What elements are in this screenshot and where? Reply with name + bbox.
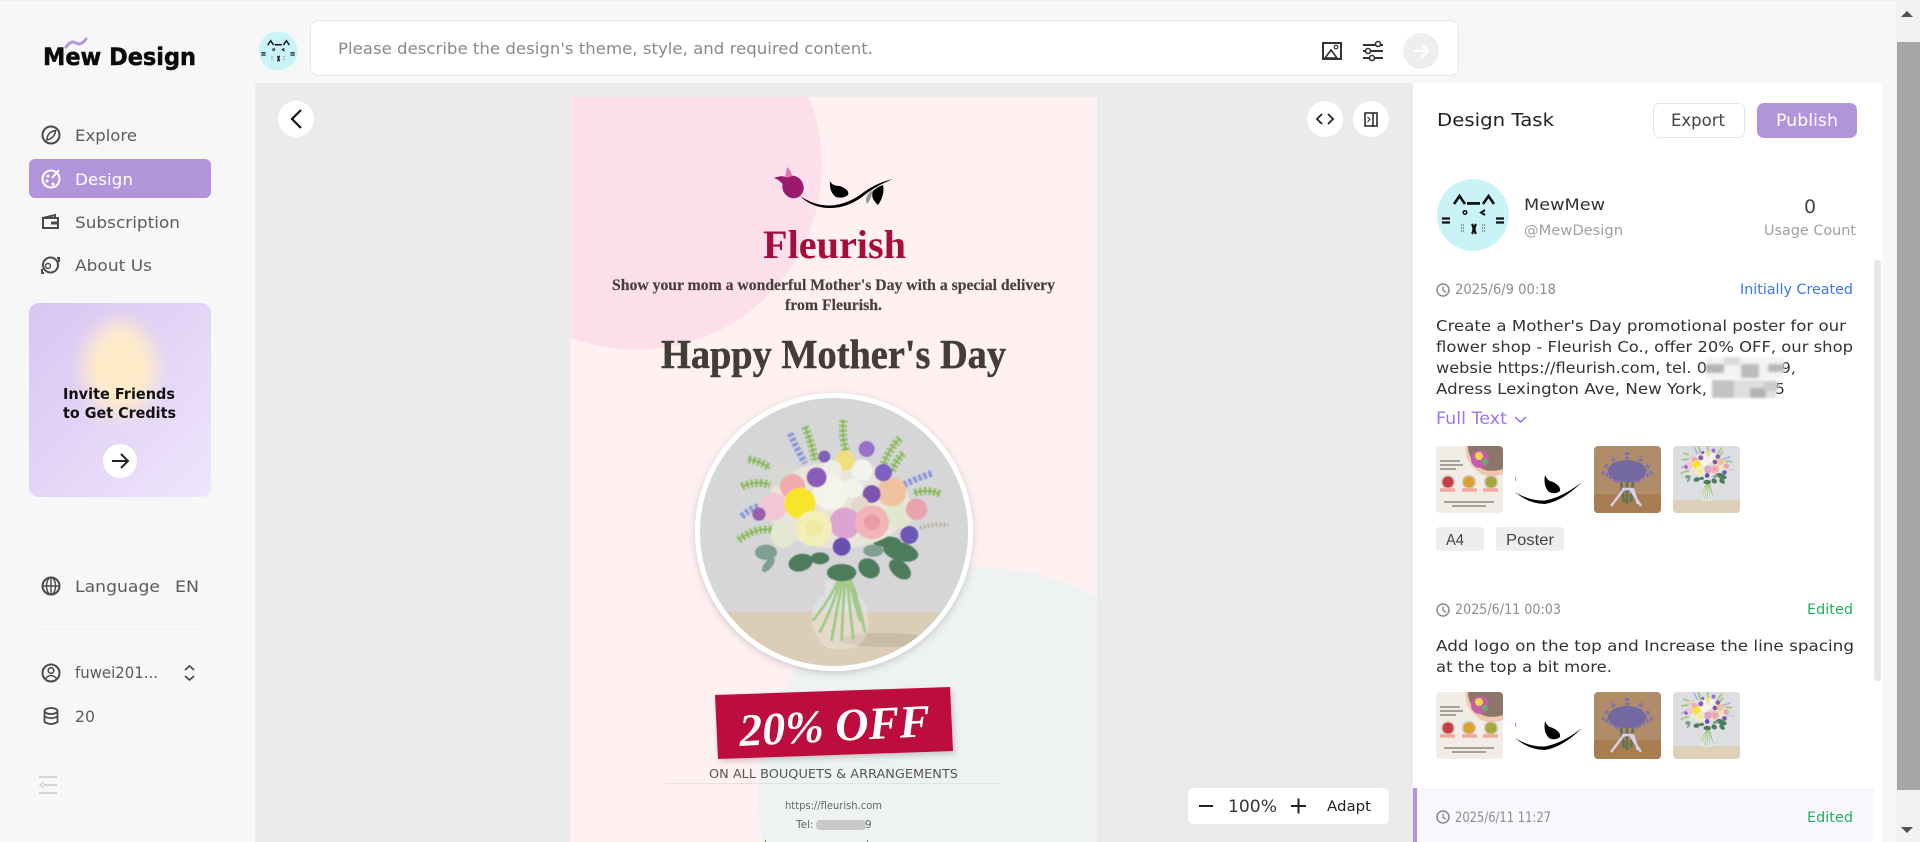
canvas area — [255, 83, 1413, 842]
history entry 1 — [1436, 282, 1853, 551]
contact details: Tel: 0 — [795, 819, 824, 831]
bouquet photo — [695, 393, 973, 672]
window scrollbar — [1896, 0, 1920, 842]
send button — [1403, 33, 1439, 69]
nav: Subscription: Subscription — [75, 213, 180, 232]
icon: settings sliders — [1363, 42, 1383, 60]
nav: Explore — [42, 126, 137, 145]
prompt text — [1436, 317, 1853, 398]
tag: Poster — [1496, 527, 1564, 551]
history entry 2 — [1436, 602, 1854, 759]
panel toggle button — [1353, 101, 1389, 137]
promo card: Invite Friends — [29, 303, 211, 497]
export button: Export — [1671, 111, 1726, 130]
prompt text: 9, — [1781, 359, 1796, 377]
heading: Fleurish: Fleurish — [763, 222, 906, 267]
full text toggle: Full Text — [1436, 409, 1508, 428]
collapse menu icon — [39, 777, 57, 793]
timestamp: 2025/6/11 00:03 — [1455, 602, 1561, 618]
promo card: Invite Friends: Invite Friends — [63, 385, 175, 403]
discount banner: 20% OFF — [737, 695, 931, 756]
nav: Design active: Design — [75, 170, 133, 189]
publish button: Publish — [1776, 111, 1838, 130]
account row: fuwei201... — [75, 663, 158, 682]
credits row: 20 — [75, 707, 95, 726]
status: Edited: Edited — [1807, 602, 1853, 618]
nav: About Us — [42, 256, 152, 275]
nav: Explore: Explore — [75, 126, 137, 145]
usage count — [1764, 196, 1857, 239]
reference thumbnails — [1436, 689, 1740, 759]
code view button — [1307, 101, 1343, 137]
avatar small cat — [258, 32, 298, 70]
prompt text: Create a Mother's Day promotional poster for our — [1436, 317, 1847, 335]
timestamp: 2025/6/9 00:18 — [1455, 282, 1556, 298]
prompt input bar: Please describe the design's theme, style, and required content. — [338, 39, 873, 58]
poster — [570, 97, 1097, 842]
redaction mosaic — [1706, 357, 1784, 398]
account row — [42, 663, 194, 682]
prompt text: Add logo on the top and Increase the line spacing — [1436, 637, 1854, 655]
status: Edited: Edited — [1807, 810, 1853, 826]
contact details: 9 — [865, 819, 872, 831]
contact details — [765, 800, 882, 842]
nav: About Us: About Us — [75, 256, 152, 275]
right panel: design task — [1413, 83, 1882, 842]
nav: Design active — [29, 159, 211, 198]
back button — [278, 101, 314, 137]
usage count: 0 — [1804, 196, 1816, 218]
credits row — [44, 707, 95, 726]
status: Initially Created: Initially Created — [1740, 282, 1853, 298]
prompt text: at the top a bit more. — [1436, 658, 1612, 676]
timestamp: 2025/6/11 11:27 — [1455, 810, 1551, 826]
reference thumbnails — [1436, 443, 1740, 513]
tag: Poster: Poster — [1506, 532, 1555, 549]
prompt text: flower shop - Fleurish Co., offer 20% OFF, our shop — [1436, 338, 1853, 356]
panel scrollbar — [1874, 260, 1881, 681]
discount banner — [715, 687, 953, 759]
prompt text: websie https://fleurish.com, tel. 0 — [1436, 359, 1707, 377]
publish button — [1757, 103, 1857, 138]
language selector — [42, 577, 199, 596]
author name — [1524, 195, 1623, 239]
panel title: Design Task — [1437, 110, 1555, 131]
language selector: Language — [75, 577, 160, 596]
brand logo — [774, 167, 893, 208]
prompt text: 5 — [1775, 380, 1785, 398]
zoom controls — [1188, 788, 1389, 824]
prompt input bar — [310, 20, 1458, 76]
author avatar — [1437, 179, 1509, 251]
sidebar — [29, 39, 211, 793]
tag: A4: A4 — [1446, 532, 1464, 549]
offer subtitle: ON ALL BOUQUETS & ARRANGEMENTS — [709, 766, 958, 781]
tagline: from Fleurish. — [785, 297, 882, 314]
tag: A4 — [1436, 527, 1484, 551]
zoom controls: 100% — [1228, 797, 1277, 817]
language selector: EN — [175, 577, 199, 596]
logo: Mew Design: Mew Design — [43, 43, 196, 71]
tagline: Show your mom a wonderful Mother's Day with a special delivery — [612, 277, 1055, 294]
prompt text — [1436, 637, 1854, 676]
contact details: https://fleurish.com — [785, 800, 882, 812]
zoom controls: Adapt — [1327, 799, 1371, 815]
author name: MewMew — [1524, 195, 1605, 214]
promo card: Invite Friends: to Get Credits — [63, 404, 176, 422]
heading: Happy Mother's Day: Happy Mother's Day — [661, 331, 1006, 377]
history entry 3 selected — [1413, 788, 1874, 842]
author name: @MewDesign — [1524, 223, 1623, 239]
tagline — [612, 278, 1055, 310]
usage count: Usage Count — [1764, 223, 1857, 239]
export button — [1654, 104, 1744, 138]
icon: image upload — [1323, 43, 1341, 59]
prompt text: Adress Lexington Ave, New York, — [1436, 380, 1707, 398]
